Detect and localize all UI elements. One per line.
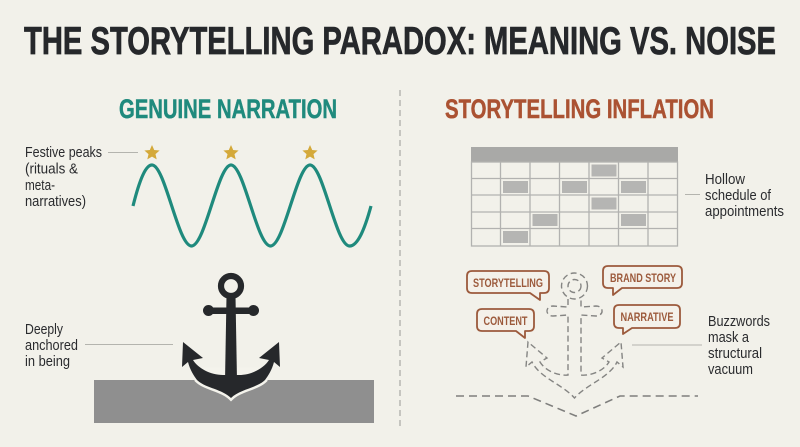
chart: calendar grid [471,147,678,246]
label: festive peaks: (rituals & [25,160,78,178]
dashed ground line [456,396,698,416]
callout: storytelling: STORYTELLING [473,278,543,290]
label: festive peaks: Festive peaks [25,144,102,161]
label: deeply anchored: Deeply [25,321,63,338]
callout: narrative: NARRATIVE [620,312,674,324]
label: hollow schedule: Hollow [705,171,745,188]
icon: gold stars [144,145,318,159]
heading: genuine narration: GENUINE NARRATION [119,94,337,124]
callout: brand story [603,266,682,295]
label: hollow schedule: schedule of [705,187,772,204]
chart: sine wave [133,165,371,246]
label: hollow schedule: appointments [705,203,784,220]
heading: storytelling inflation: STORYTELLING INFLATION [445,94,714,124]
label: festive peaks: meta- [25,177,55,194]
ground block [94,380,374,423]
panel: storytelling inflation [445,94,784,416]
label: buzzwords: structural [708,345,762,362]
callout: content [477,309,534,338]
label: deeply anchored: anchored [25,337,78,354]
label: buzzwords: Buzzwords [708,313,770,330]
panel: genuine narration [25,94,374,423]
label: festive peaks [25,144,138,210]
label: buzzwords: mask a [708,329,750,346]
callout: narrative [614,305,680,334]
icon: solid anchor [182,276,280,398]
label: buzzwords: vacuum [708,361,753,378]
callout: brand story: BRAND STORY [610,273,676,285]
callout: storytelling [467,271,549,300]
label: hollow schedule [685,171,784,220]
label: festive peaks: narratives) [25,193,86,210]
label: buzzwords [632,313,770,378]
callout: content: CONTENT [484,316,528,328]
label: deeply anchored [25,321,173,370]
label: deeply anchored: in being [25,353,70,370]
icon: dashed hollow anchor [526,273,623,398]
